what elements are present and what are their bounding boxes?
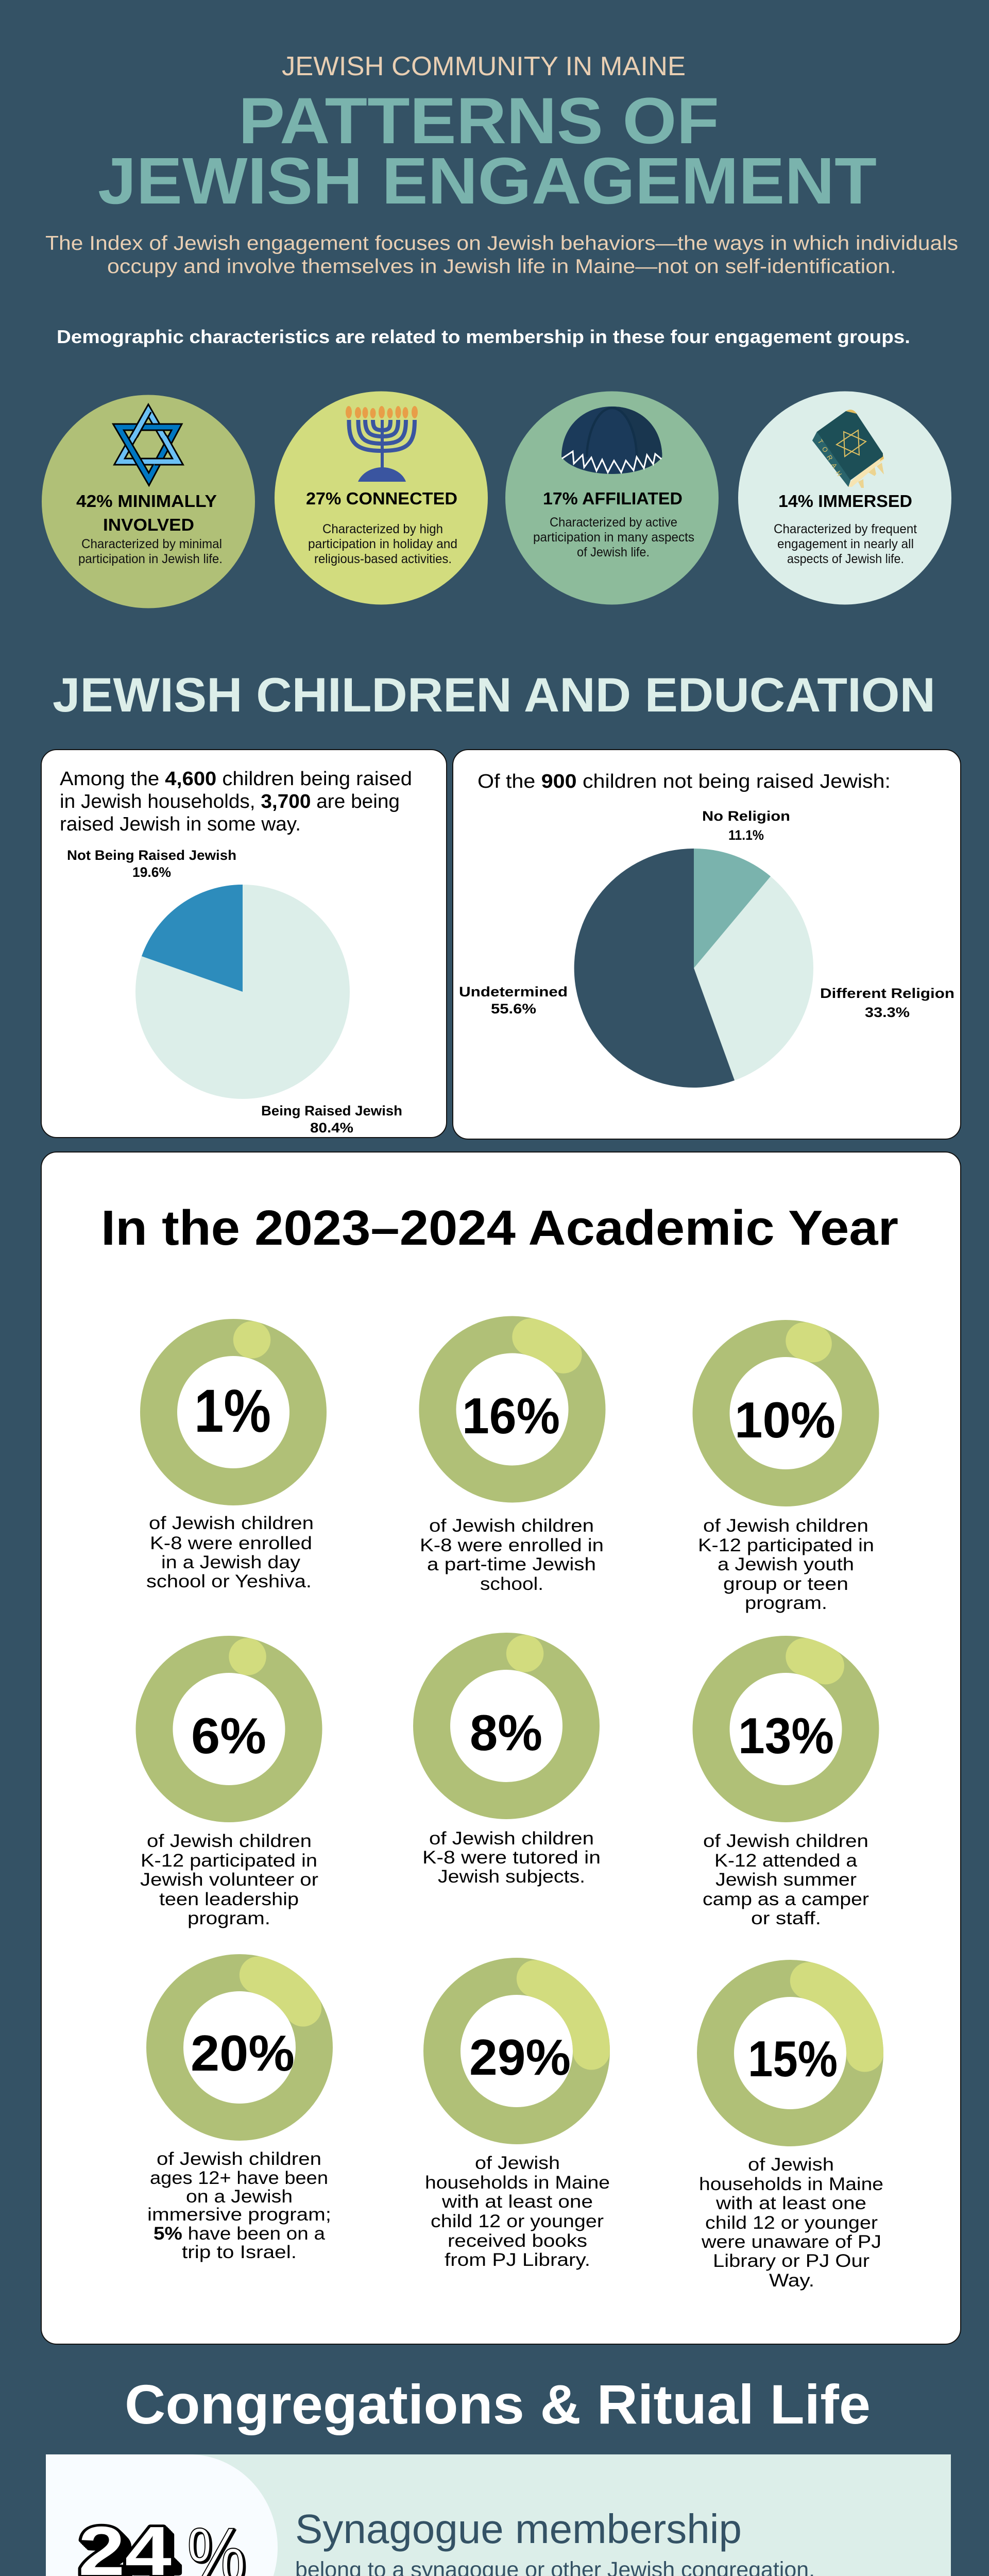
stat: 20 percent immersive program: ages 12+ have been — [150, 2168, 328, 2188]
stat: 13 percent summer camp: camp as a camper — [703, 1889, 869, 1909]
stat: 8 percent tutored: Jewish subjects. — [438, 1867, 585, 1887]
eyebrow: JEWISH COMMUNITY IN MAINE — [282, 52, 686, 81]
stat: 29 percent pj library books: received books — [448, 2231, 587, 2251]
group: affiliated: of Jewish life. — [577, 545, 650, 560]
stat: 16 percent part-time school: of Jewish children — [429, 1516, 594, 1536]
stat: 1 percent day school: of Jewish children — [149, 1513, 314, 1533]
group: connected: 27% CONNECTED — [306, 489, 457, 508]
group: immersed: aspects of Jewish life. — [787, 552, 904, 566]
stat: 29 percent pj library books: with at least one — [441, 2192, 593, 2212]
group: minimally involved: Characterized by minimal — [81, 537, 222, 551]
stat: 29 percent pj library books: child 12 or younger — [431, 2211, 604, 2231]
figure: 24 percent — [78, 2512, 246, 2576]
label: undetermined: 55.6% — [491, 1001, 536, 1016]
stat: 1 percent day school: K-8 were enrolled — [150, 1533, 312, 1553]
stat: 13 percent summer camp: or staff. — [751, 1908, 821, 1928]
stat: 20 percent immersive program: of Jewish children — [157, 2149, 321, 2169]
stat: 10 percent youth group: K-12 participated in — [698, 1535, 874, 1555]
stat: 16 percent part-time school: a part-time Jewish — [427, 1554, 596, 1574]
label: no religion — [702, 808, 790, 843]
label: not being raised jewish — [67, 848, 236, 880]
group: immersed: Characterized by frequent — [774, 522, 917, 536]
label: not being raised jewish: Not Being Raised Jewish — [67, 848, 236, 863]
panel text: raised Jewish in some way. — [60, 814, 301, 835]
stat: 15 percent unaware of pj library — [699, 1962, 883, 2291]
group: affiliated: Characterized by active — [550, 515, 677, 530]
stat: 6 percent volunteer: teen leadership — [159, 1889, 299, 1909]
title — [98, 84, 877, 218]
group: connected: Characterized by high — [322, 522, 443, 536]
icon: star of david — [118, 411, 178, 479]
stat: 10 percent youth group — [695, 1323, 877, 1613]
group: minimally involved — [42, 395, 255, 608]
stat: 10 percent youth group: 10% — [735, 1392, 835, 1448]
stat: 13 percent summer camp: K-12 attended a — [714, 1851, 858, 1871]
label: undetermined: Undetermined — [459, 984, 568, 999]
stat: 15 percent unaware of pj library: child 12 or younger — [705, 2213, 878, 2233]
stat: 6 percent volunteer: of Jewish children — [147, 1831, 312, 1851]
label: being raised jewish: Being Raised Jewish — [261, 1103, 402, 1118]
intro paragraph: The Index of Jewish engagement focuses on Jewish behaviors—the ways in which individuals — [45, 232, 958, 255]
group: immersed — [738, 392, 951, 605]
title: JEWISH ENGAGEMENT — [98, 144, 877, 218]
label: no religion: 11.1% — [728, 827, 764, 843]
stat: 1 percent day school: school or Yeshiva. — [146, 1571, 312, 1591]
heading: jewish children and education: JEWISH CHILDREN AND EDUCATION — [53, 668, 935, 722]
stat: 16 percent part-time school: school. — [480, 1574, 543, 1594]
stat: 1 percent day school — [143, 1321, 324, 1591]
icon: torah book — [812, 410, 884, 488]
label: not being raised jewish: 19.6% — [132, 865, 171, 880]
intro paragraph: occupy and involve themselves in Jewish life in Maine—not on self-identification. — [107, 256, 896, 278]
stat: 8 percent tutored: 8% — [470, 1704, 542, 1761]
label: being raised jewish — [261, 1103, 402, 1136]
stat: 15 percent unaware of pj library: 15% — [748, 2030, 838, 2087]
stat: 10 percent youth group: of Jewish children — [703, 1516, 868, 1536]
stat: 16 percent part-time school: K-8 were enrolled in — [420, 1535, 604, 1555]
pie chart: religion of children — [574, 849, 813, 1088]
stat: 6 percent volunteer: Jewish volunteer or — [140, 1870, 318, 1890]
stat: 29 percent pj library books: households in Maine — [425, 2173, 610, 2193]
label: different religion: 33.3% — [865, 1005, 910, 1020]
heading: academic year: In the 2023–2024 Academic Year — [101, 1200, 898, 1256]
group: minimally involved: INVOLVED — [103, 515, 194, 534]
stat: 16 percent part-time school — [420, 1318, 604, 1594]
panel text: Among the 4,600 children being raised — [60, 768, 412, 790]
label: different religion — [820, 986, 954, 1020]
stat: 6 percent volunteer — [138, 1638, 320, 1928]
stat: 20 percent immersive program: on a Jewish — [186, 2187, 293, 2207]
panel: academic year — [41, 1152, 961, 2344]
header block — [45, 52, 958, 347]
demographic statement: Demographic characteristics are related to membership in these four engagement groups. — [57, 326, 910, 347]
stat: 1 percent day school: 1% — [194, 1377, 271, 1445]
stat: 20 percent immersive program — [147, 1957, 331, 2262]
title: PATTERNS OF — [238, 84, 719, 157]
panel text: Of the 900 children not being raised Jewish: — [478, 771, 891, 792]
heading: congregations and ritual life: Congregations & Ritual Life — [125, 2373, 871, 2435]
group: affiliated: participation in many aspects — [533, 530, 694, 545]
intro paragraph — [45, 232, 958, 278]
stat: 13 percent summer camp: of Jewish children — [703, 1831, 868, 1851]
panel text: in Jewish households, 3,700 are being — [60, 791, 400, 812]
stat: 1 percent day school: in a Jewish day — [161, 1552, 301, 1572]
stat: 29 percent pj library books: of Jewish — [475, 2153, 560, 2173]
stat: 10 percent youth group: group or teen — [723, 1574, 848, 1594]
row: synagogue membership — [46, 2454, 951, 2576]
stat: 10 percent youth group: a Jewish youth — [718, 1554, 854, 1574]
stat: 8 percent tutored — [416, 1635, 601, 1887]
stat: 13 percent summer camp: 13% — [738, 1707, 834, 1764]
stat: 15 percent unaware of pj library: households in Maine — [699, 2174, 883, 2194]
panel: engagement groups — [42, 392, 951, 608]
stat: 15 percent unaware of pj library: Library or PJ Our — [713, 2251, 869, 2271]
stat: 8 percent tutored: K-8 were tutored in — [422, 1848, 601, 1868]
stat: 15 percent unaware of pj library: with at least one — [715, 2193, 866, 2213]
stat: 20 percent immersive program: 20% — [191, 2025, 295, 2081]
panel: children raised jewish — [41, 750, 447, 1138]
stat: 6 percent volunteer: K-12 participated in — [141, 1851, 317, 1871]
icon: kippah — [561, 406, 662, 474]
stat: 6 percent volunteer: program. — [187, 1908, 270, 1928]
row: synagogue membership: Synagogue membership — [295, 2506, 742, 2552]
stat: 20 percent immersive program: immersive program; — [147, 2205, 331, 2225]
stat: 13 percent summer camp: Jewish summer — [715, 1870, 857, 1890]
icon: menorah — [346, 406, 418, 482]
group: affiliated: 17% AFFILIATED — [543, 489, 683, 508]
group: connected — [275, 392, 488, 605]
stat: 29 percent pj library books — [425, 1960, 610, 2270]
group: minimally involved: 42% MINIMALLY — [76, 492, 217, 511]
group: connected: participation in holiday and — [308, 537, 457, 551]
stat: 20 percent immersive program: 5% have been on a — [154, 2224, 326, 2244]
stat: 13 percent summer camp — [695, 1638, 877, 1928]
stat: 8 percent tutored: of Jewish children — [429, 1828, 594, 1849]
panel: children not raised jewish — [453, 750, 961, 1139]
label: no religion: No Religion — [702, 808, 790, 824]
group: minimally involved: participation in Jewish life. — [78, 552, 223, 566]
label: different religion: Different Religion — [820, 986, 954, 1001]
label: being raised jewish: 80.4% — [310, 1120, 353, 1136]
stat: 20 percent immersive program: trip to Israel. — [182, 2242, 297, 2262]
stat: 15 percent unaware of pj library: of Jewish — [748, 2155, 834, 2175]
stat: 16 percent part-time school: 16% — [462, 1387, 560, 1444]
stat: 29 percent pj library books: from PJ Library. — [445, 2250, 590, 2270]
group: immersed: engagement in nearly all — [777, 537, 914, 551]
stat: 10 percent youth group: program. — [745, 1593, 827, 1613]
stat: 15 percent unaware of pj library: were unaware of PJ — [701, 2232, 881, 2252]
stat: 15 percent unaware of pj library: Way. — [769, 2270, 814, 2291]
group: connected: religious-based activities. — [314, 552, 452, 566]
group: affiliated — [505, 392, 719, 605]
panel text — [60, 768, 412, 835]
stat: 6 percent volunteer: 6% — [191, 1707, 266, 1764]
label: undetermined — [459, 984, 568, 1016]
stat: 29 percent pj library books: 29% — [469, 2029, 571, 2086]
group: immersed: 14% IMMERSED — [778, 492, 912, 511]
pie chart: being raised jewish — [135, 885, 350, 1099]
icon: torah book: TORAH — [816, 438, 843, 478]
